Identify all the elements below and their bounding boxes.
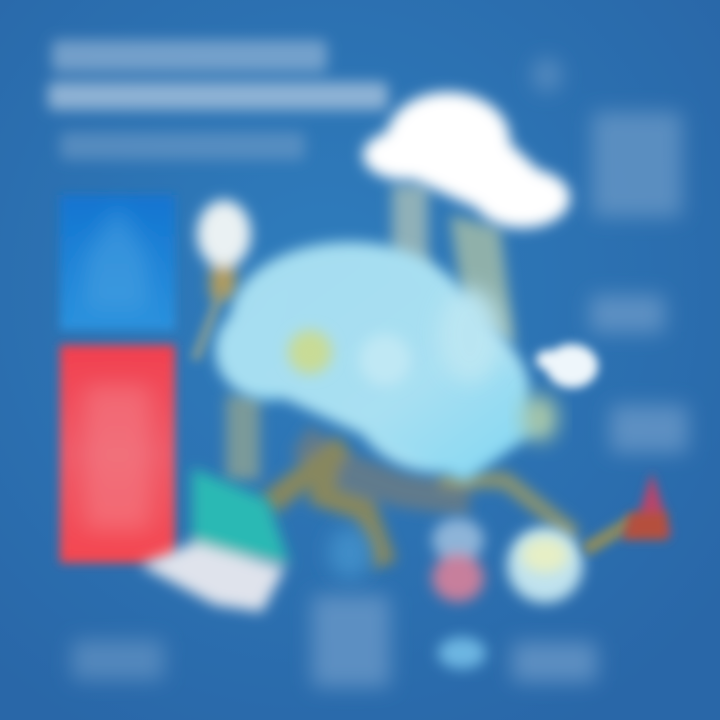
cloud edge olive	[522, 394, 558, 442]
icon: light bulb	[197, 200, 251, 298]
small white cloud	[536, 344, 598, 388]
database top	[432, 518, 484, 562]
text block one	[592, 112, 682, 217]
main cloud	[215, 242, 545, 482]
white cloud	[363, 92, 570, 228]
text block three	[610, 405, 688, 453]
connector olive right	[440, 480, 575, 535]
small cyan icon	[438, 637, 486, 669]
pillar right	[450, 215, 515, 345]
bottom text centre	[312, 595, 390, 687]
icon: faint symbol on cloud	[359, 334, 411, 386]
database icon	[432, 518, 484, 602]
globe yellow highlight	[521, 537, 569, 573]
laptop	[140, 468, 290, 612]
pillar left	[392, 185, 428, 290]
panel: blue card	[60, 195, 175, 330]
bottom text right	[512, 642, 597, 682]
globe	[507, 527, 583, 603]
connector: laptop to cloud	[226, 395, 260, 480]
icon: gear on cloud	[288, 330, 332, 374]
laptop screen	[192, 468, 290, 565]
icon: red warning marker	[622, 472, 672, 540]
title line one	[52, 40, 327, 72]
title block	[48, 40, 388, 160]
white cloud pillars	[392, 185, 515, 345]
subtitle	[60, 132, 305, 160]
small blue icon	[328, 527, 372, 579]
blue card icon and text	[85, 205, 148, 310]
connector: globe to marker	[585, 520, 635, 550]
connector dark web	[300, 440, 470, 500]
bottom text left	[72, 640, 164, 680]
title line two	[48, 82, 388, 110]
connector: bulb to cloud	[195, 290, 222, 360]
right column text blocks	[532, 58, 688, 453]
laptop base	[140, 542, 285, 612]
panel: red card	[60, 345, 175, 563]
red card text	[85, 385, 150, 530]
marker base	[622, 512, 668, 540]
bottom text blocks	[72, 595, 597, 687]
top small icon	[532, 58, 562, 92]
connector web	[268, 445, 385, 565]
highlight on main cloud	[438, 287, 502, 383]
text block two	[590, 295, 665, 333]
connectors	[226, 395, 575, 565]
database bottom	[432, 554, 484, 602]
